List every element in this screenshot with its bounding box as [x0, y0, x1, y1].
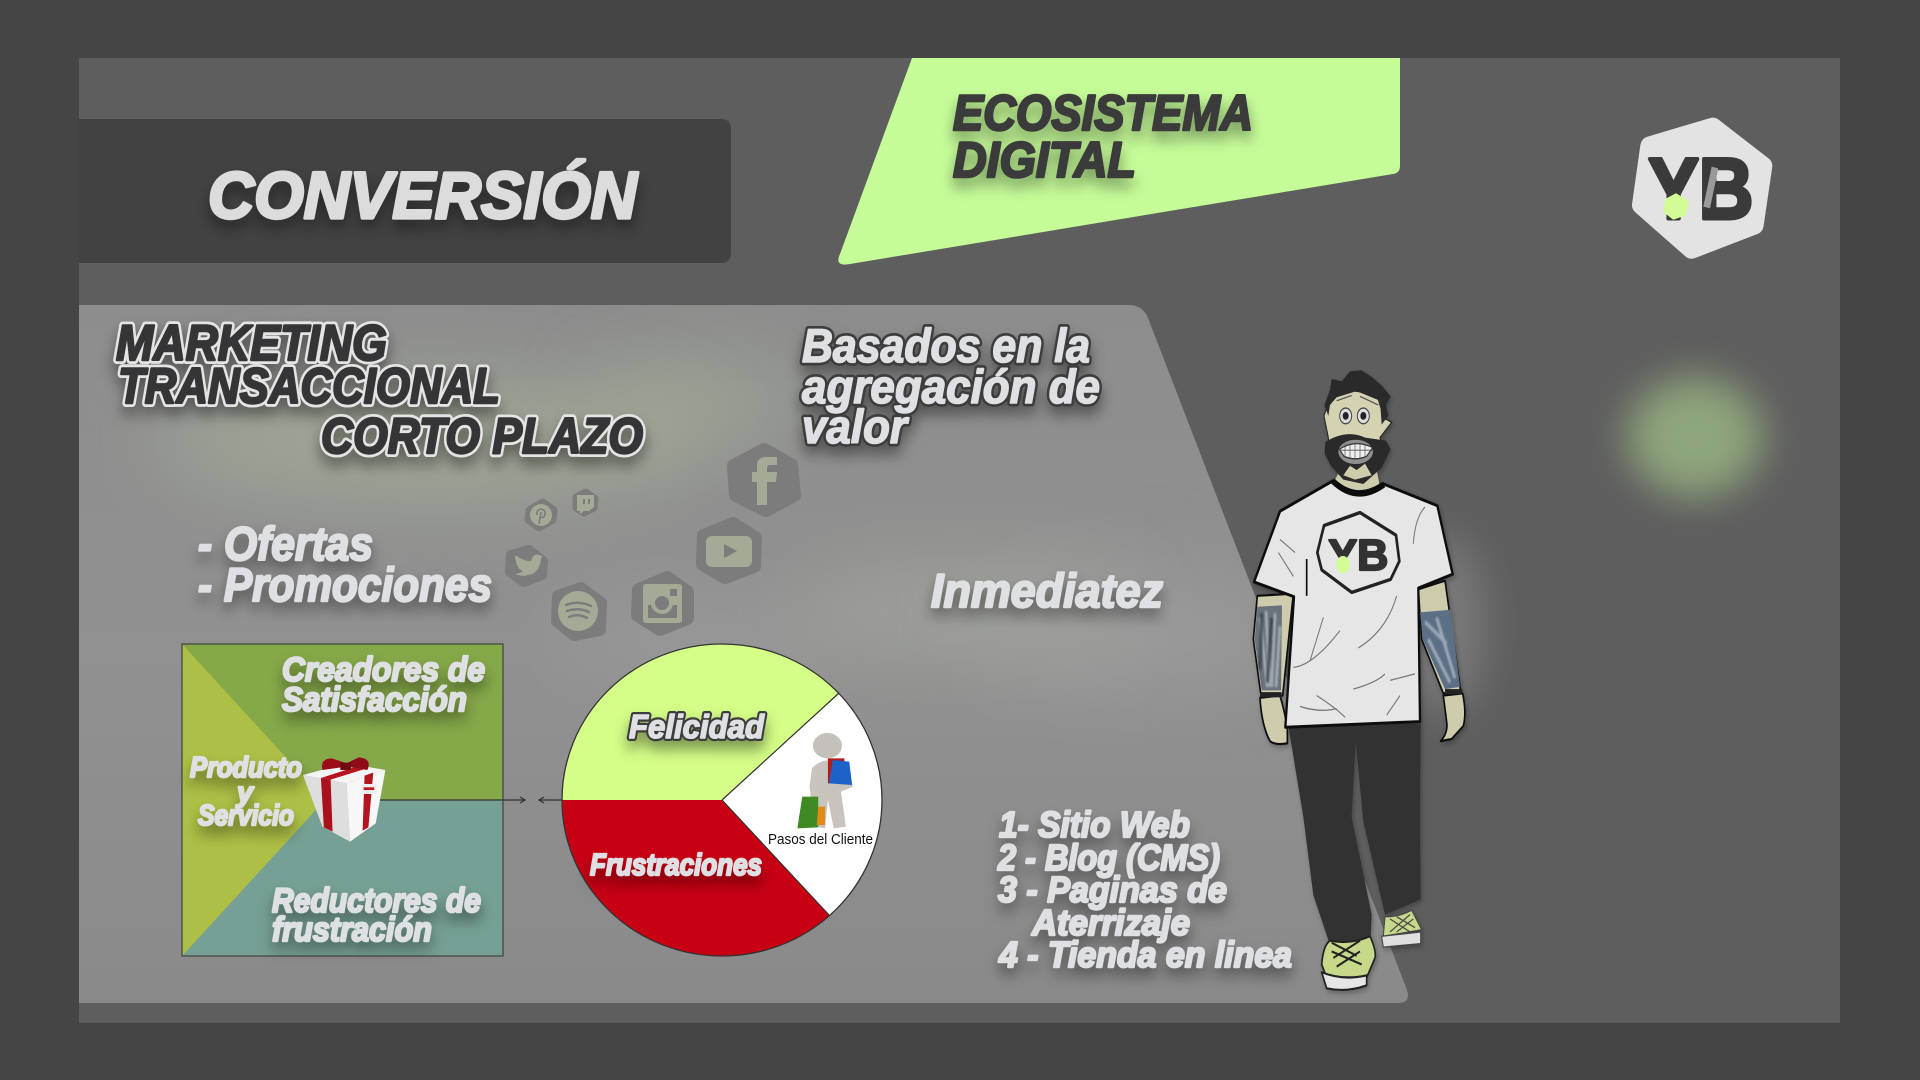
label: felicidad: Felicidad	[629, 708, 765, 745]
neck	[1333, 470, 1380, 496]
shirt logo: YB	[1328, 532, 1388, 580]
text: inmediatez: Inmediatez	[931, 564, 1163, 617]
icon: youtube	[703, 524, 755, 577]
chart: value proposition square	[182, 644, 562, 956]
icon: shopper figure	[797, 733, 853, 828]
text: ofertas y promociones: - Promociones	[198, 558, 492, 611]
heading: marketing transaccional corto plazo: TRANSACCIONAL	[118, 358, 500, 414]
list: digital ecosystem items: 1- Sitio Web	[999, 804, 1190, 845]
label: frustraciones: Frustraciones	[590, 847, 762, 882]
text: basados en la agregación de valor: agregación de	[802, 360, 1100, 413]
heading: ecosistema digital: ECOSISTEMA	[953, 85, 1253, 141]
text: basados en la agregación de valor: Basados en la	[802, 319, 1090, 372]
heading: marketing transaccional corto plazo: MARKETING	[116, 315, 387, 371]
label: producto y servicio: Producto	[190, 752, 302, 784]
label: producto y servicio	[190, 752, 302, 832]
connector: square to wheel	[380, 797, 562, 803]
shoe: left	[1322, 936, 1375, 990]
icon: twitch	[576, 492, 595, 514]
arm: right with tattoo	[1418, 581, 1465, 741]
label: pasos del cliente: Pasos del Cliente	[768, 831, 873, 848]
heading: conversión: CONVERSIÓN	[208, 158, 638, 232]
blurred glow: grey behind figure	[1405, 535, 1485, 715]
label: reductores de frustración: frustración	[272, 911, 432, 949]
heading: marketing transaccional corto plazo: CORTO PLAZO	[321, 408, 643, 464]
text: basados en la agregación de valor: valor	[802, 400, 910, 453]
icon: spotify	[557, 588, 601, 635]
icon: gift box	[303, 757, 385, 842]
list: digital ecosystem items: Aterrizaje	[1031, 902, 1190, 943]
text: basados en la agregación de valor: agregación de	[802, 360, 1100, 413]
icon: twitter	[510, 550, 543, 582]
header: conversion bar	[79, 119, 731, 263]
icon: instagram	[638, 578, 687, 629]
list: digital ecosystem items: 4 - Tienda en linea	[998, 934, 1292, 975]
list: digital ecosystem items: 3 - Paginas de	[998, 869, 1227, 910]
label: creadores de satisfacción: Creadores de	[282, 651, 485, 689]
label: producto y servicio: Servicio	[198, 800, 294, 832]
heading: ecosistema digital	[953, 85, 1253, 188]
icon: pinterest	[528, 502, 554, 528]
label: creadores de satisfacción	[282, 651, 485, 719]
icon: facebook	[734, 450, 794, 510]
text: basados en la agregación de valor: valor	[802, 400, 910, 453]
text: basados en la agregación de valor	[802, 319, 1100, 453]
shirt logo	[1317, 513, 1399, 592]
panel: main content	[79, 305, 1408, 1003]
heading: marketing transaccional corto plazo	[116, 315, 643, 464]
label: reductores de frustración	[272, 882, 481, 949]
label: felicidad: Felicidad	[629, 708, 765, 745]
label: creadores de satisfacción: Satisfacción	[282, 681, 467, 719]
logo: YB hexagon: YB	[1648, 142, 1753, 238]
text: basados en la agregación de valor: Basados en la	[802, 319, 1090, 372]
list: digital ecosystem items: 2 - Blog (CMS)	[997, 837, 1220, 878]
text: ofertas y promociones: - Ofertas	[198, 517, 373, 570]
heading: ecosistema digital: DIGITAL	[953, 132, 1136, 188]
blurred glow: green right	[1627, 377, 1763, 497]
pants	[1288, 724, 1421, 945]
banner: ecosistema digital	[838, 58, 1400, 265]
chart: customer profile wheel	[561, 643, 883, 957]
shoe: right	[1382, 910, 1422, 947]
heading: marketing transaccional corto plazo: TRANSACCIONAL	[118, 358, 500, 414]
list: digital ecosystem items	[997, 804, 1292, 975]
icons: social network hexagons	[510, 450, 794, 635]
label: reductores de frustración: Reductores de	[272, 882, 481, 920]
heading: marketing transaccional corto plazo: CORTO PLAZO	[321, 408, 643, 464]
head	[1324, 370, 1392, 484]
text: ofertas y promociones	[198, 517, 492, 611]
arm: left with tattoo	[1253, 594, 1293, 744]
shirt	[1254, 481, 1453, 727]
heading: marketing transaccional corto plazo: MARKETING	[116, 315, 387, 371]
label: producto y servicio: y	[235, 777, 255, 809]
figure: illustrated man	[1253, 370, 1465, 990]
